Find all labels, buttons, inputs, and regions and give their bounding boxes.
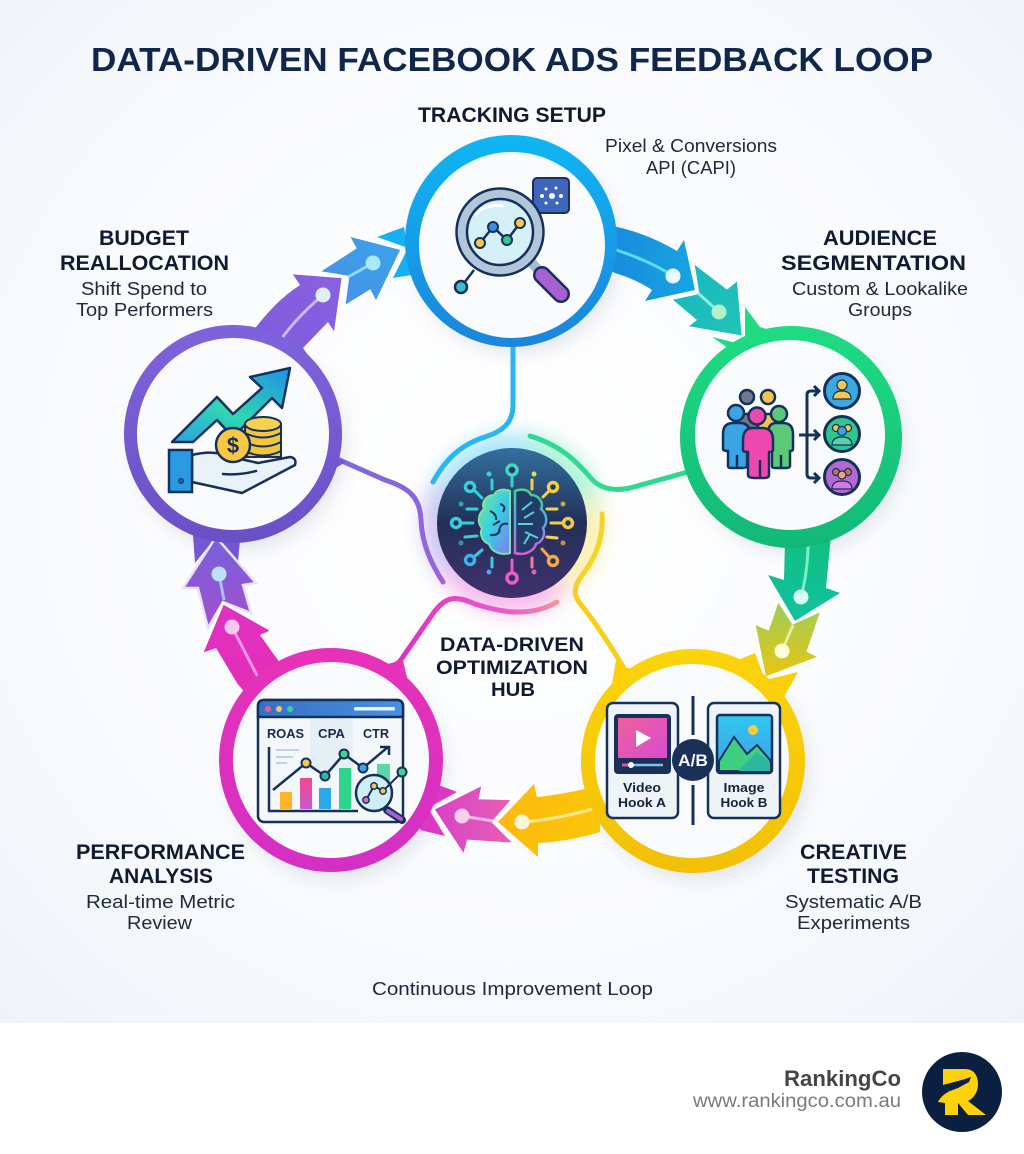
footer brand text: www.rankingco.com.au [692,1091,901,1112]
label: audience segmentation [781,227,968,320]
step 5 ring: budget reallocation [124,325,342,543]
step 3 ring: creative testing [581,649,805,873]
arrow: creative to performance [420,653,798,857]
icon: metrics dashboard: ROAS [267,726,304,741]
label: performance analysis: Review [127,913,193,933]
label: tracking setup [418,104,777,178]
footer band [0,1023,1024,1154]
icon: audience split into groups [723,374,860,494]
label: budget reallocation: REALLOCATION [60,252,229,275]
arrow: tracking to audience [600,224,743,337]
ring shadows [133,146,905,880]
label: creative testing: Systematic A/B [785,892,922,912]
label: budget reallocation: Top Performers [76,300,213,320]
arrow: budget to tracking [250,227,412,365]
label: budget reallocation: BUDGET [99,227,189,250]
label: performance analysis: PERFORMANCE [76,841,245,864]
label: creative testing [785,841,922,933]
label: performance analysis [76,841,245,933]
label: creative testing: CREATIVE [800,841,907,864]
icon: A/B creative comparison: Hook B [720,795,768,810]
icon: hand with coins and growth arrow [169,368,295,493]
label: performance analysis: Real-time Metric [86,892,235,912]
label: creative testing: TESTING [807,865,899,888]
title: DATA-DRIVEN FACEBOOK ADS FEEDBACK LOOP [91,41,933,78]
icon: neural brain [452,465,572,583]
icon: A/B creative comparison: A/B [678,751,708,770]
label: performance analysis: ANALYSIS [109,865,213,888]
icon: metrics dashboard [258,700,406,822]
icon: A/B creative comparison: Video [623,780,661,795]
label: budget reallocation [60,227,229,320]
label: tracking setup: API (CAPI) [646,158,736,178]
icon: magnifier with chart and pixel [455,178,569,294]
footer brand text: RankingCo [784,1066,901,1091]
label: tracking setup: Pixel & Conversions [605,136,777,156]
central hub: brain [437,448,587,598]
label: creative testing: Experiments [797,913,910,933]
arrow: audience to creative [712,307,840,678]
icon: metrics dashboard: CPA [318,726,346,741]
label: optimization hub: HUB [491,680,535,701]
logo: RankingCo [922,1052,1002,1132]
step 4 ring: performance analysis [219,648,443,872]
hub glow [437,447,590,599]
icon: hand with coins and growth arrow: $ [227,433,239,458]
connector flares at rings [330,335,700,684]
label: audience segmentation: Custom & Lookalike [792,279,968,299]
arrow: performance to budget [183,535,285,705]
icon: metrics dashboard: CTR [363,726,390,741]
label: audience segmentation: Groups [848,300,912,320]
step 1 ring: tracking setup [405,135,617,347]
footer brand text [692,1066,901,1112]
label: optimization hub [436,635,588,701]
icon: A/B creative comparison: Hook A [618,795,667,810]
label: audience segmentation: SEGMENTATION [781,252,966,275]
label: budget reallocation: Shift Spend to [81,279,207,299]
step 2 ring: audience segmentation [680,326,902,548]
icon: A/B creative comparison: Image [724,780,764,795]
hub connector lines [335,340,695,668]
label: optimization hub: OPTIMIZATION [436,658,588,679]
label: optimization hub: DATA-DRIVEN [440,635,584,656]
icon: A/B creative comparison [607,696,780,825]
caption: continuous improvement loop: Continuous Improvement Loop [372,979,653,999]
label: tracking setup: TRACKING SETUP [418,104,606,127]
label: audience segmentation: AUDIENCE [823,227,937,250]
